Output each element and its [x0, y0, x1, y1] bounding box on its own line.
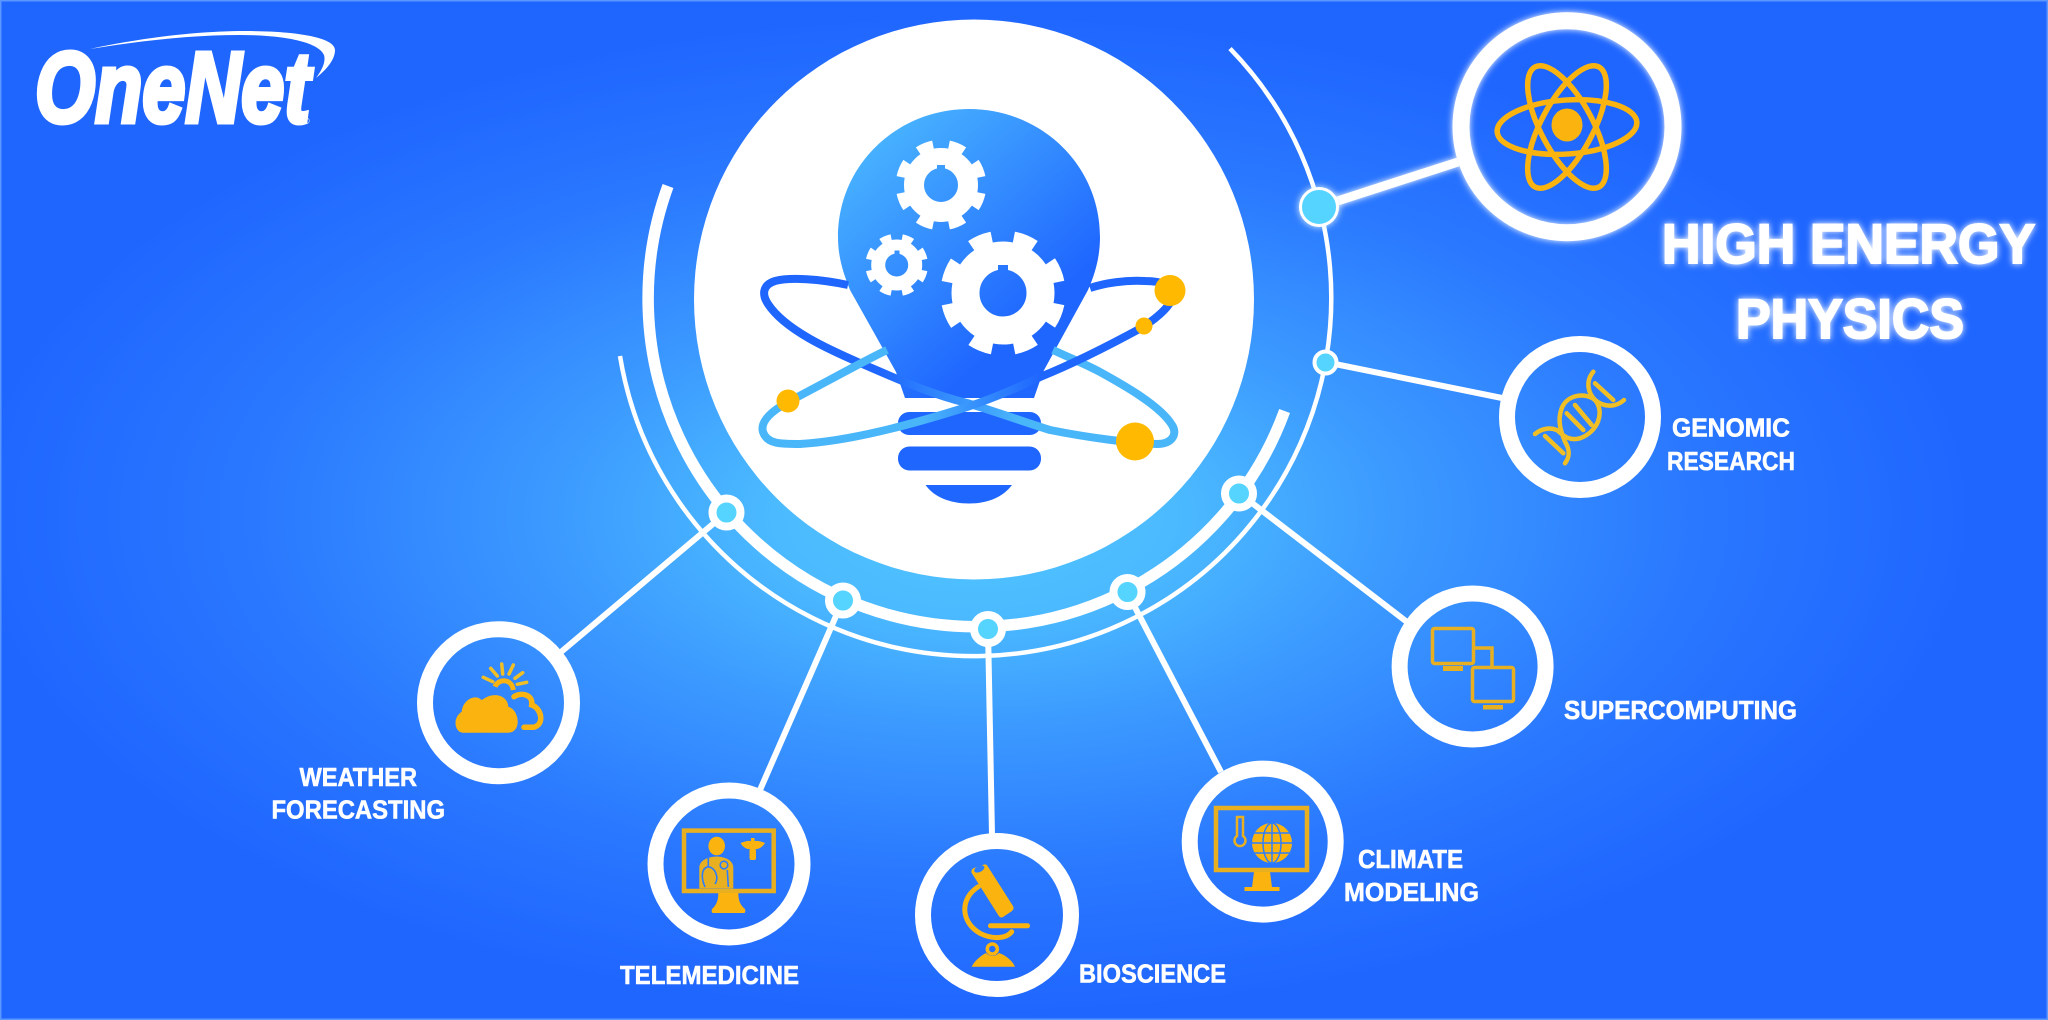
logo: OneNet: ®	[303, 116, 310, 126]
node: climate modeling	[1190, 769, 1336, 915]
node: high energy physics	[1461, 21, 1673, 233]
label: telemedicine: TELEMEDICINE	[620, 960, 799, 990]
label: climate modeling	[1344, 844, 1479, 907]
arc nodes	[712, 188, 1338, 643]
icon: cloud and sun	[455, 664, 541, 733]
label: genomic research	[1667, 412, 1795, 476]
bulb glass	[838, 109, 1100, 398]
label: genomic research: GENOMIC	[1672, 412, 1790, 442]
icon: atom	[1495, 55, 1639, 199]
label: weather forecasting: FORECASTING	[272, 794, 445, 824]
outer thin arc	[620, 49, 1331, 656]
node: bioscience	[923, 841, 1071, 989]
node: weather forecasting	[425, 629, 572, 776]
icon: networked computers	[1432, 628, 1514, 710]
central icon: light bulb with gears and atom orbits	[762, 109, 1186, 504]
node: supercomputing	[1400, 594, 1546, 740]
bulb base bars	[898, 412, 1041, 504]
node: telemedicine	[656, 790, 802, 938]
heading: high energy physics: HIGH ENERGY	[1662, 212, 2035, 275]
heading: high energy physics	[1662, 212, 2035, 350]
icon: monitor with thermometer and globe	[1216, 808, 1307, 891]
heading: high energy physics: PHYSICS	[1736, 287, 1964, 350]
node: genomic research	[1507, 344, 1653, 490]
gear: top	[893, 137, 989, 233]
label: genomic research: RESEARCH	[1667, 446, 1795, 476]
gear: small	[864, 232, 930, 298]
icon: doctor on monitor	[684, 831, 774, 913]
central white circle	[694, 20, 1254, 580]
icon: dna	[1535, 372, 1624, 463]
inner thick arc	[648, 186, 1285, 627]
icon: microscope	[965, 864, 1030, 967]
connector lines	[561, 162, 1502, 835]
label: weather forecasting	[272, 762, 445, 824]
label: weather forecasting: WEATHER	[300, 762, 417, 792]
logo: OneNet: OneNet	[35, 32, 313, 144]
gear: large	[937, 227, 1069, 359]
label: bioscience: BIOSCIENCE	[1079, 958, 1226, 988]
label: climate modeling: MODELING	[1344, 877, 1479, 907]
orbits	[762, 279, 1174, 444]
label: climate modeling: CLIMATE	[1358, 844, 1463, 874]
orbit balls	[776, 275, 1186, 460]
label: supercomputing: SUPERCOMPUTING	[1564, 695, 1797, 725]
